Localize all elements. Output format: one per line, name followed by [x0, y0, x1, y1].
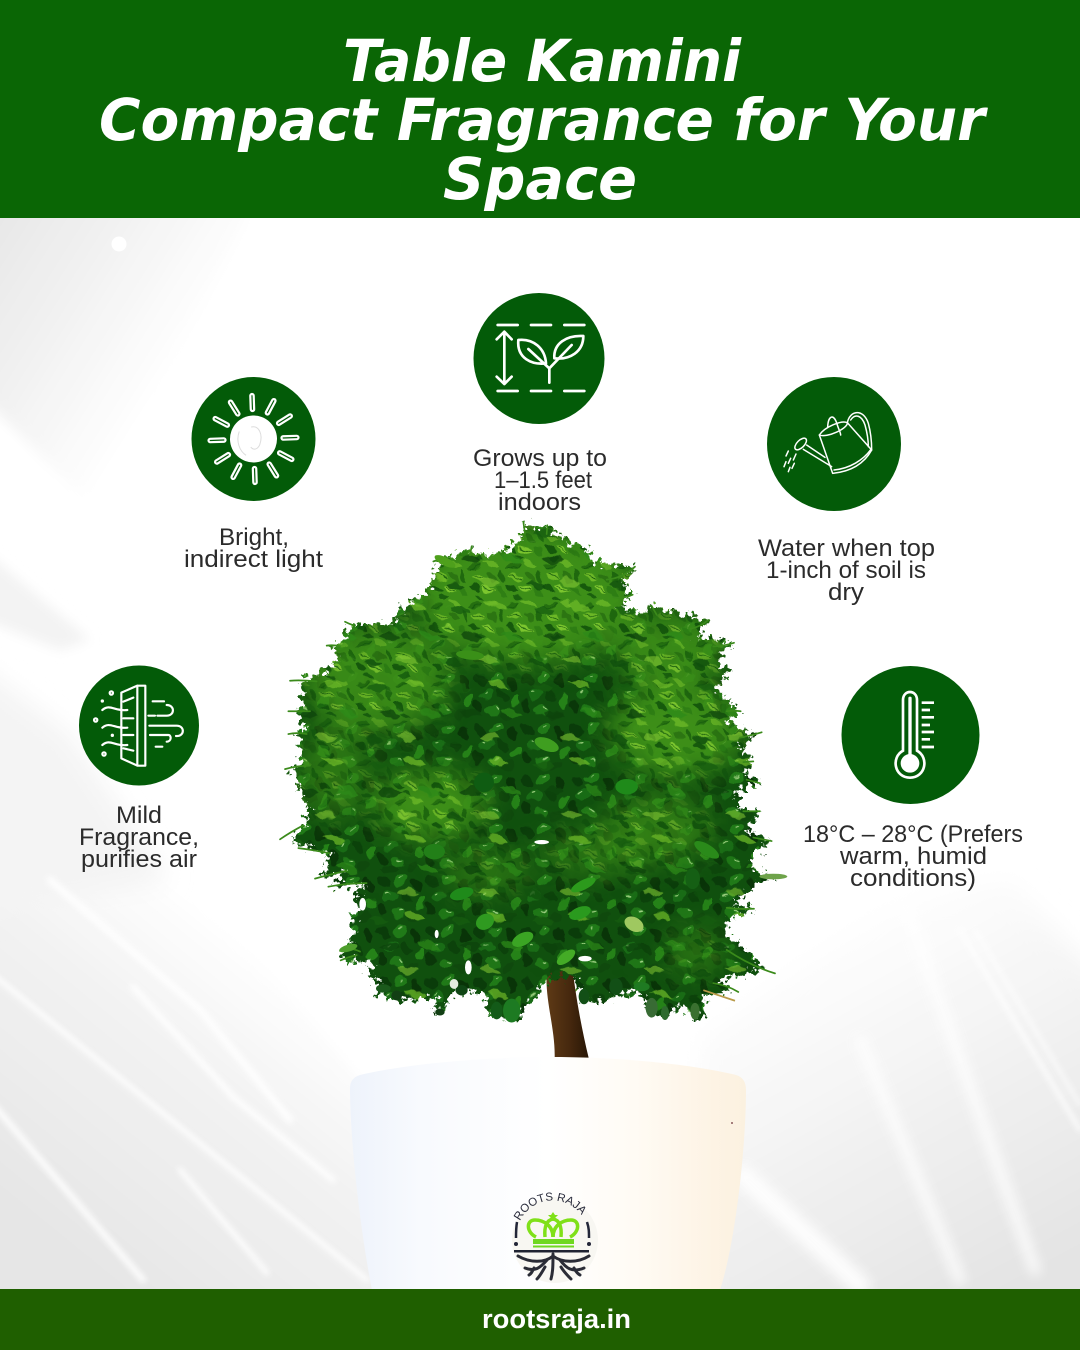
text: height: indoors [498, 489, 581, 516]
pot logo: Roots Raja badge: ROOTS RAJA [514, 1192, 586, 1220]
icon: sun [192, 377, 316, 501]
title: Compact Fragrance for Your [99, 86, 988, 154]
decorative light spot [112, 236, 126, 252]
text: water [758, 535, 935, 606]
trunk [546, 960, 589, 1058]
text: light [184, 524, 323, 573]
text: height: 1–1.5 feet [494, 467, 592, 494]
title: Space [443, 145, 637, 213]
feature: light [184, 377, 323, 573]
icon: plant height [474, 293, 604, 424]
title: Table Kamini [343, 27, 742, 95]
feature: air [79, 666, 199, 873]
highlighted leaves [338, 553, 787, 1022]
footer website text: rootsraja.in [482, 1304, 631, 1334]
feature: size [473, 293, 607, 516]
icon: air purifying filter [79, 666, 199, 786]
header banner [0, 0, 1080, 218]
text: air: purifies air [81, 846, 197, 873]
sprigs at the crown edge [280, 522, 775, 992]
text: temperature: warm, humid [839, 843, 987, 870]
icon: watering can [767, 377, 901, 511]
text: air: Mild [116, 802, 162, 829]
text: air [79, 802, 199, 873]
text: height [473, 445, 607, 516]
text: temperature: 18°C – 28°C (Prefers [803, 821, 1023, 848]
foliage crown [286, 518, 778, 1022]
footer band [0, 1289, 1080, 1350]
plant pot [350, 1057, 746, 1289]
pot logo: Roots Raja badge [512, 1192, 591, 1283]
text: water: 1-inch of soil is [766, 557, 926, 584]
text: water: dry [828, 579, 865, 606]
light gaps in foliage [359, 840, 592, 974]
text: water: Water when top [758, 535, 935, 562]
text: light: Bright, [219, 524, 289, 551]
plant: bushy tree with trunk [267, 506, 813, 1058]
feature: temperature [803, 666, 1023, 892]
title [99, 27, 988, 213]
text: height: Grows up to [473, 445, 607, 472]
text: light: indirect light [184, 546, 323, 573]
icon: thermometer [842, 666, 980, 804]
feature: water [758, 377, 935, 606]
text: temperature: conditions) [850, 865, 976, 892]
text: air: Fragrance, [79, 824, 199, 851]
text: temperature [803, 821, 1023, 892]
